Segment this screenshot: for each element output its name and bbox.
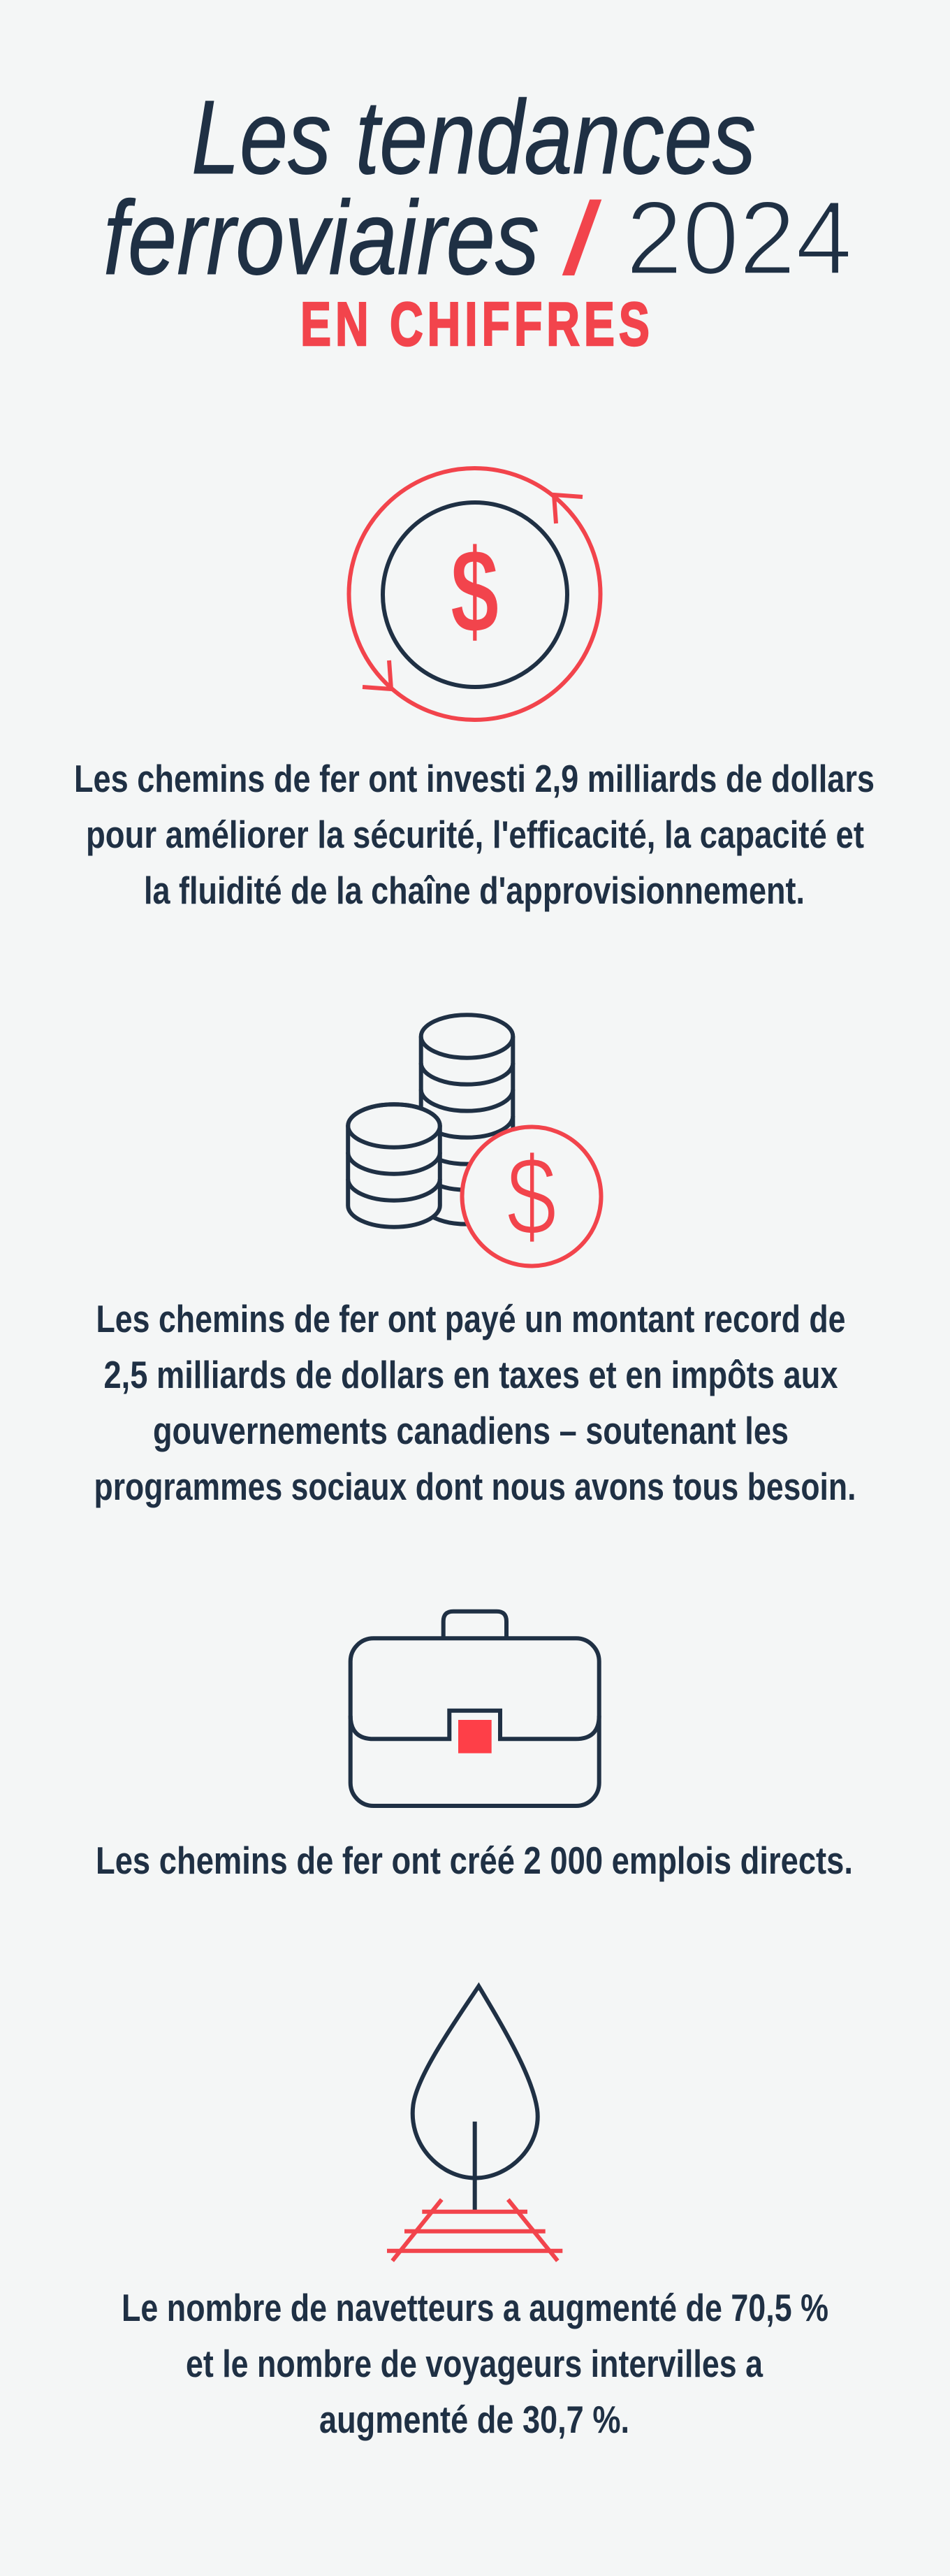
text block 4 [122,2286,828,2441]
red coin [462,1127,601,1266]
flap [351,1711,599,1739]
text block 2 [94,1297,856,1508]
title slash: / [563,182,601,296]
rails [393,2199,557,2261]
text block 2: gouvernements canadiens – soutenant les [153,1409,789,1452]
red clasp [458,1720,492,1753]
icon: tree and rail tracks [387,1986,562,2261]
title year: 2024 [626,179,852,296]
tree crown [413,1986,538,2178]
large coin stack [421,1015,513,1224]
text block 4: augmenté de 30,7 %. [319,2398,629,2441]
dollar sign: $ [506,1133,557,1259]
outer red circle [349,468,601,720]
text block 4: et le nombre de voyageurs intervilles a [186,2342,763,2385]
arrow head bottom [363,660,391,689]
inner navy circle [383,502,567,687]
icon: coin stacks with dollar [348,1015,601,1266]
title line 1: Les tendances [191,78,756,196]
icon: dollar with circular arrows [349,468,601,720]
subtitle: EN CHIFFRES [300,291,654,359]
arrow head top [554,495,583,523]
case body [351,1638,599,1806]
dollar sign: $ [451,524,499,658]
handle [444,1612,506,1638]
small coin stack [348,1104,440,1227]
title [103,78,852,359]
text block 1: la fluidité de la chaîne d'approvisionnement. [144,869,805,912]
title line 2: ferroviaires [103,179,539,296]
tree trunk [473,2122,477,2210]
icon: briefcase [351,1612,599,1806]
text block 1 [74,757,875,912]
rail ties [387,2212,562,2251]
